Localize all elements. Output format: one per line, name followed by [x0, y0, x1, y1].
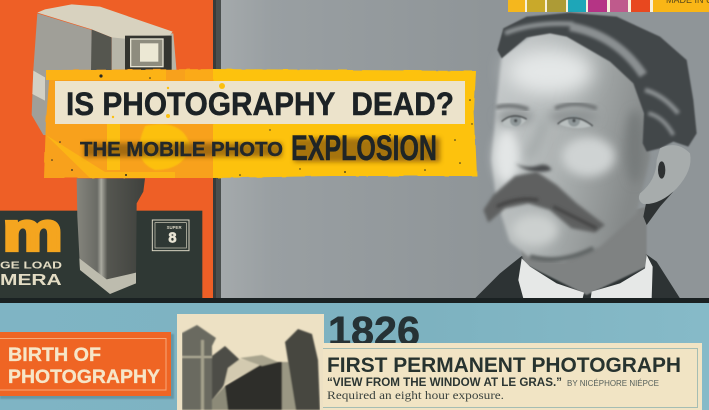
portrait collar — [518, 255, 653, 298]
panel: grey portrait background — [213, 0, 709, 298]
banner yellow patches — [46, 70, 213, 178]
camera viewfinder — [125, 36, 172, 70]
super 8 logo: SUPER — [167, 225, 182, 230]
panel: orange camera background — [0, 0, 213, 298]
portrait left eye — [502, 115, 527, 127]
camera front panel — [112, 33, 177, 133]
section tag: birth of photography — [0, 332, 174, 399]
caption card — [323, 343, 702, 410]
section tag: birth of photography: PHOTOGRAPHY — [8, 366, 160, 388]
camera dark side strip — [90, 29, 112, 133]
title banner — [44, 69, 477, 178]
cream box paint drops — [112, 83, 225, 118]
dark vertical strip — [213, 0, 221, 298]
first photograph card — [177, 314, 324, 410]
portrait chin shadow — [530, 248, 593, 259]
camera side band — [32, 71, 45, 101]
subtitle text: THE MOBILE PHOTO — [80, 139, 283, 161]
camera body left face — [32, 13, 92, 137]
portrait: moustached man — [475, 13, 697, 298]
portrait neck — [518, 207, 647, 295]
caption credit: BY NICÉPHORE NIÉPCE — [567, 378, 659, 388]
panel: blue timeline section — [0, 303, 709, 410]
super 8 logo — [152, 220, 189, 251]
portrait forehead highlight — [507, 48, 593, 95]
portrait moustache texture — [497, 199, 597, 228]
black divider band — [0, 298, 709, 303]
label line: cartridge load: GE LOAD — [0, 261, 62, 272]
portrait temple shadow — [625, 110, 645, 183]
caption description: Required an eight hour exposure. — [327, 390, 504, 402]
section tag: birth of photography: BIRTH OF — [8, 344, 101, 366]
portrait hair behind ear — [643, 192, 673, 225]
camera handle base — [79, 258, 136, 294]
banner translucent left section — [44, 69, 213, 178]
banner yellow tape — [213, 69, 477, 178]
banner cream title box — [55, 81, 465, 124]
colour swatch bar — [508, 0, 709, 12]
portrait ear — [639, 145, 691, 204]
subtitle emphasis: EXPLOSION — [291, 129, 437, 168]
portrait chin highlight — [512, 214, 558, 246]
portrait eyebrows — [496, 104, 597, 109]
portrait suit — [475, 253, 680, 298]
banner paint specks — [51, 74, 473, 176]
portrait left cheek highlight — [494, 130, 519, 183]
camera with dark label — [0, 4, 202, 298]
subtitle shadow — [84, 138, 440, 162]
camera top plate — [37, 4, 173, 39]
portrait cheek highlight — [562, 137, 615, 177]
label letter m: m — [3, 201, 63, 263]
portrait face — [492, 30, 650, 262]
view from the window picture — [182, 325, 320, 410]
portrait right eye — [558, 115, 593, 128]
caption heading: FIRST PERMANENT PHOTOGRAPH — [327, 354, 681, 377]
portrait hair highlights — [505, 24, 678, 135]
super 8 logo: 8 — [168, 230, 176, 246]
label line: camera: MERA — [0, 272, 62, 289]
portrait moustache — [483, 172, 605, 233]
dark camera label — [0, 211, 202, 298]
camera handle — [77, 178, 145, 294]
portrait nose — [515, 120, 552, 172]
year 1826: 1826 — [328, 308, 420, 354]
title text: IS PHOTOGRAPHY DEAD? — [66, 86, 454, 122]
portrait eye sockets shadow — [497, 109, 598, 124]
portrait hair — [497, 13, 697, 152]
caption title line: “VIEW FROM THE WINDOW AT LE GRAS.” — [327, 377, 562, 389]
